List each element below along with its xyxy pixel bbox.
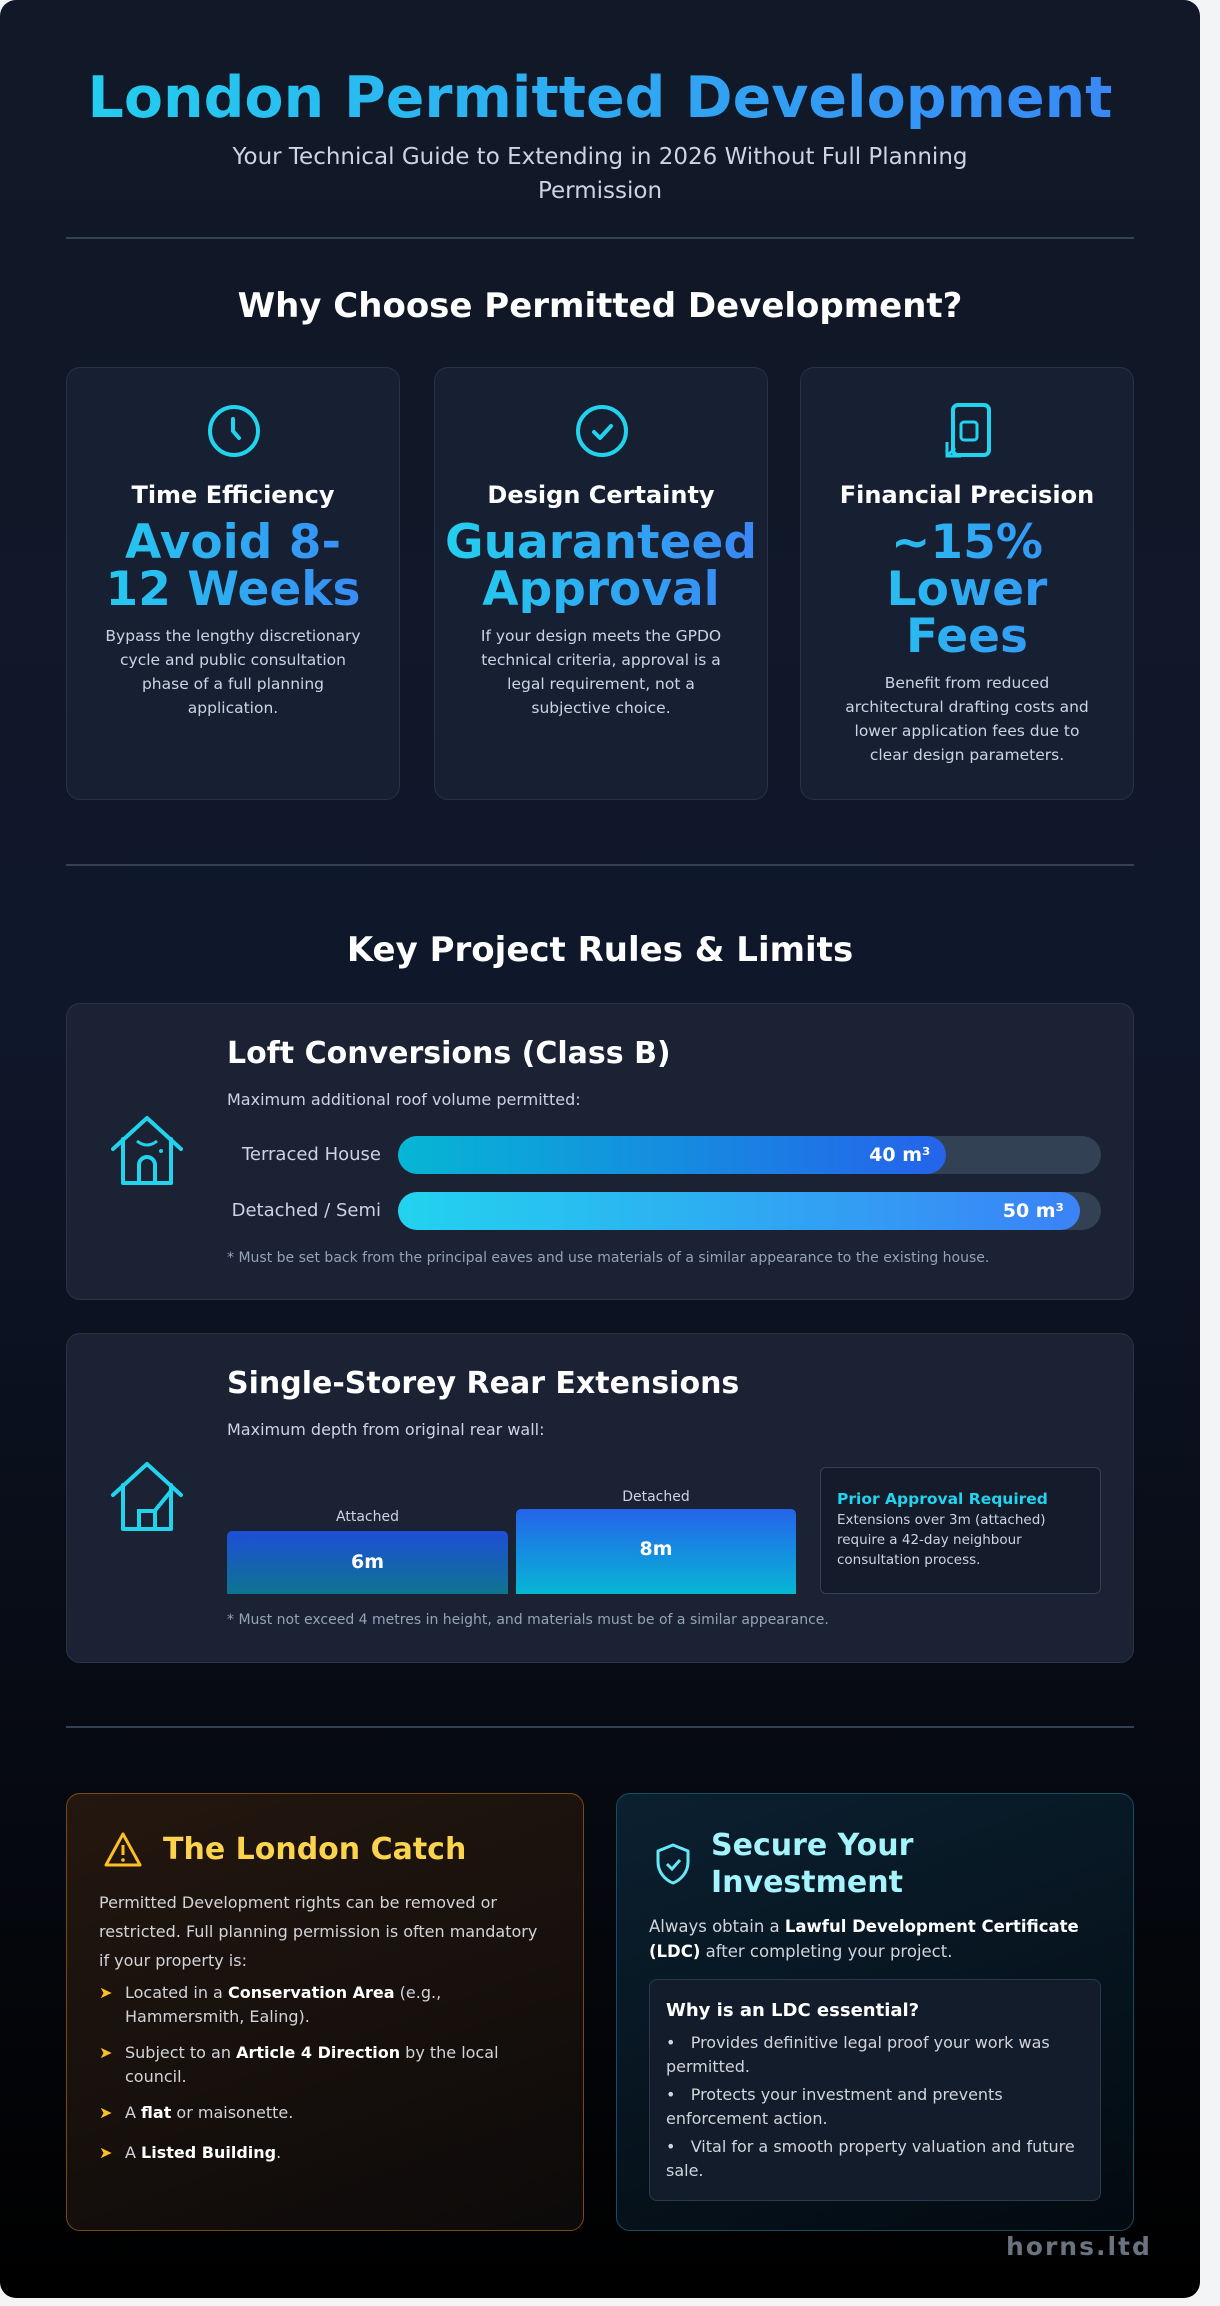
bar chart: depth: Attached: [336, 1509, 399, 1525]
list: A flat or maisonette.: [125, 2103, 293, 2122]
description: If your design meets the GPDO technical criteria, approval is a legal requirement, not a subjective choice.: [481, 627, 721, 717]
big value: Fees: [906, 609, 1028, 664]
icon: warning: [104, 1832, 142, 1866]
paragraph: Permitted Development rights can be removed or restricted. Full planning permission is often mandatory if your property is:: [99, 1893, 537, 1970]
inner box: why LDC: Why is an LDC essential?: [666, 2000, 919, 2021]
list: Subject to an Article 4 Direction by the local council.: [125, 2043, 499, 2086]
footnote: * Must not exceed 4 metres in height, and materials must be of a similar appearance.: [227, 1612, 829, 1628]
card title: Design Certainty: [487, 481, 715, 509]
list: [99, 1983, 499, 2162]
callout: prior approval: Extensions over 3m (attached) require a 42-day neighbour consultation process.: [837, 1512, 1046, 1568]
bar: terraced: 40 m³: [869, 1144, 930, 1166]
heading: The London Catch: [163, 1832, 466, 1867]
card title: Time Efficiency: [131, 481, 335, 509]
bar chart: depth: Detached: [622, 1489, 690, 1505]
subtitle: Your Technical Guide to Extending in 2026 Without Full Planning Permission: [232, 144, 968, 204]
inner box: why LDC: [649, 1979, 1101, 2201]
bar chart: depth: [227, 1489, 796, 1594]
list: ➤: [99, 2143, 112, 2162]
callout: prior approval: [820, 1467, 1101, 1594]
watermark: horns.ltd: [1006, 2232, 1152, 2261]
footnote: * Must be set back from the principal eaves and use materials of a similar appearance to the existing house.: [227, 1250, 989, 1266]
paragraph: Always obtain a Lawful Development Certificate (LDC) after completing your project.: [649, 1917, 1079, 1961]
bar: terraced: Terraced House: [242, 1144, 381, 1165]
subtitle: Maximum depth from original rear wall:: [227, 1420, 544, 1439]
callout: prior approval: Prior Approval Required: [837, 1490, 1048, 1508]
list: ➤: [99, 2043, 112, 2062]
big value: ~15%: [891, 515, 1043, 570]
big value: [67, 519, 399, 613]
icon: check circle: [576, 405, 628, 457]
big value: Lower: [887, 562, 1047, 617]
bar: detached: [232, 1192, 1101, 1230]
big value: Approval: [482, 562, 720, 617]
card: financial precision: [800, 367, 1134, 800]
bar chart: depth: 6m: [351, 1551, 384, 1573]
card title: Financial Precision: [840, 481, 1094, 509]
title: Single-Storey Rear Extensions: [227, 1366, 739, 1401]
title: Loft Conversions (Class B): [227, 1036, 671, 1071]
panel: london catch: [66, 1793, 584, 2231]
inner box: why LDC: • Protects your investment and prevents enforcement action.: [666, 2085, 1003, 2128]
panel: loft conversions: [66, 1003, 1134, 1300]
heading: Investment: [711, 1865, 903, 1900]
heading: [711, 1828, 914, 1900]
big value: Avoid 8-: [125, 515, 341, 570]
inner box: why LDC: • Provides definitive legal proof your work was permitted.: [666, 2033, 1050, 2076]
icon: shield: [656, 1844, 690, 1884]
list: ➤: [99, 1983, 112, 2002]
list: Located in a Conservation Area (e.g., Hammersmith, Ealing).: [125, 1983, 441, 2026]
heading: Secure Your: [711, 1828, 913, 1863]
panel: secure investment: [616, 1793, 1134, 2231]
big value: Guaranteed: [445, 515, 757, 570]
inner box: why LDC: • Vital for a smooth property valuation and future sale.: [666, 2137, 1075, 2180]
list: ➤: [99, 2103, 112, 2122]
heading: why choose: Why Choose Permitted Development?: [238, 286, 962, 326]
card: design certainty: [434, 367, 768, 800]
icon: cash: [946, 403, 991, 458]
heading: key rules: Key Project Rules & Limits: [347, 930, 853, 970]
description: Benefit from reduced architectural drafting costs and lower application fees due to clear design parameters.: [845, 674, 1089, 764]
panel: rear extensions: [66, 1333, 1134, 1663]
title: London Permitted Development: [88, 65, 1112, 131]
bar: terraced: [242, 1136, 1101, 1174]
icon: house extension: [110, 1462, 184, 1531]
big value: [801, 519, 1133, 660]
icon: clock: [208, 405, 260, 457]
list: A Listed Building.: [125, 2143, 281, 2162]
description: Bypass the lengthy discretionary cycle and public consultation phase of a full planning application.: [105, 627, 361, 717]
bar chart: depth: 8m: [639, 1538, 673, 1560]
subtitle: Maximum additional roof volume permitted:: [227, 1090, 581, 1109]
big value: 12 Weeks: [106, 562, 360, 617]
bar: detached: 50 m³: [1003, 1200, 1064, 1222]
icon: house: [110, 1116, 184, 1185]
card: time efficiency: [66, 367, 400, 800]
big value: [431, 519, 771, 613]
bar: detached: Detached / Semi: [232, 1200, 381, 1221]
